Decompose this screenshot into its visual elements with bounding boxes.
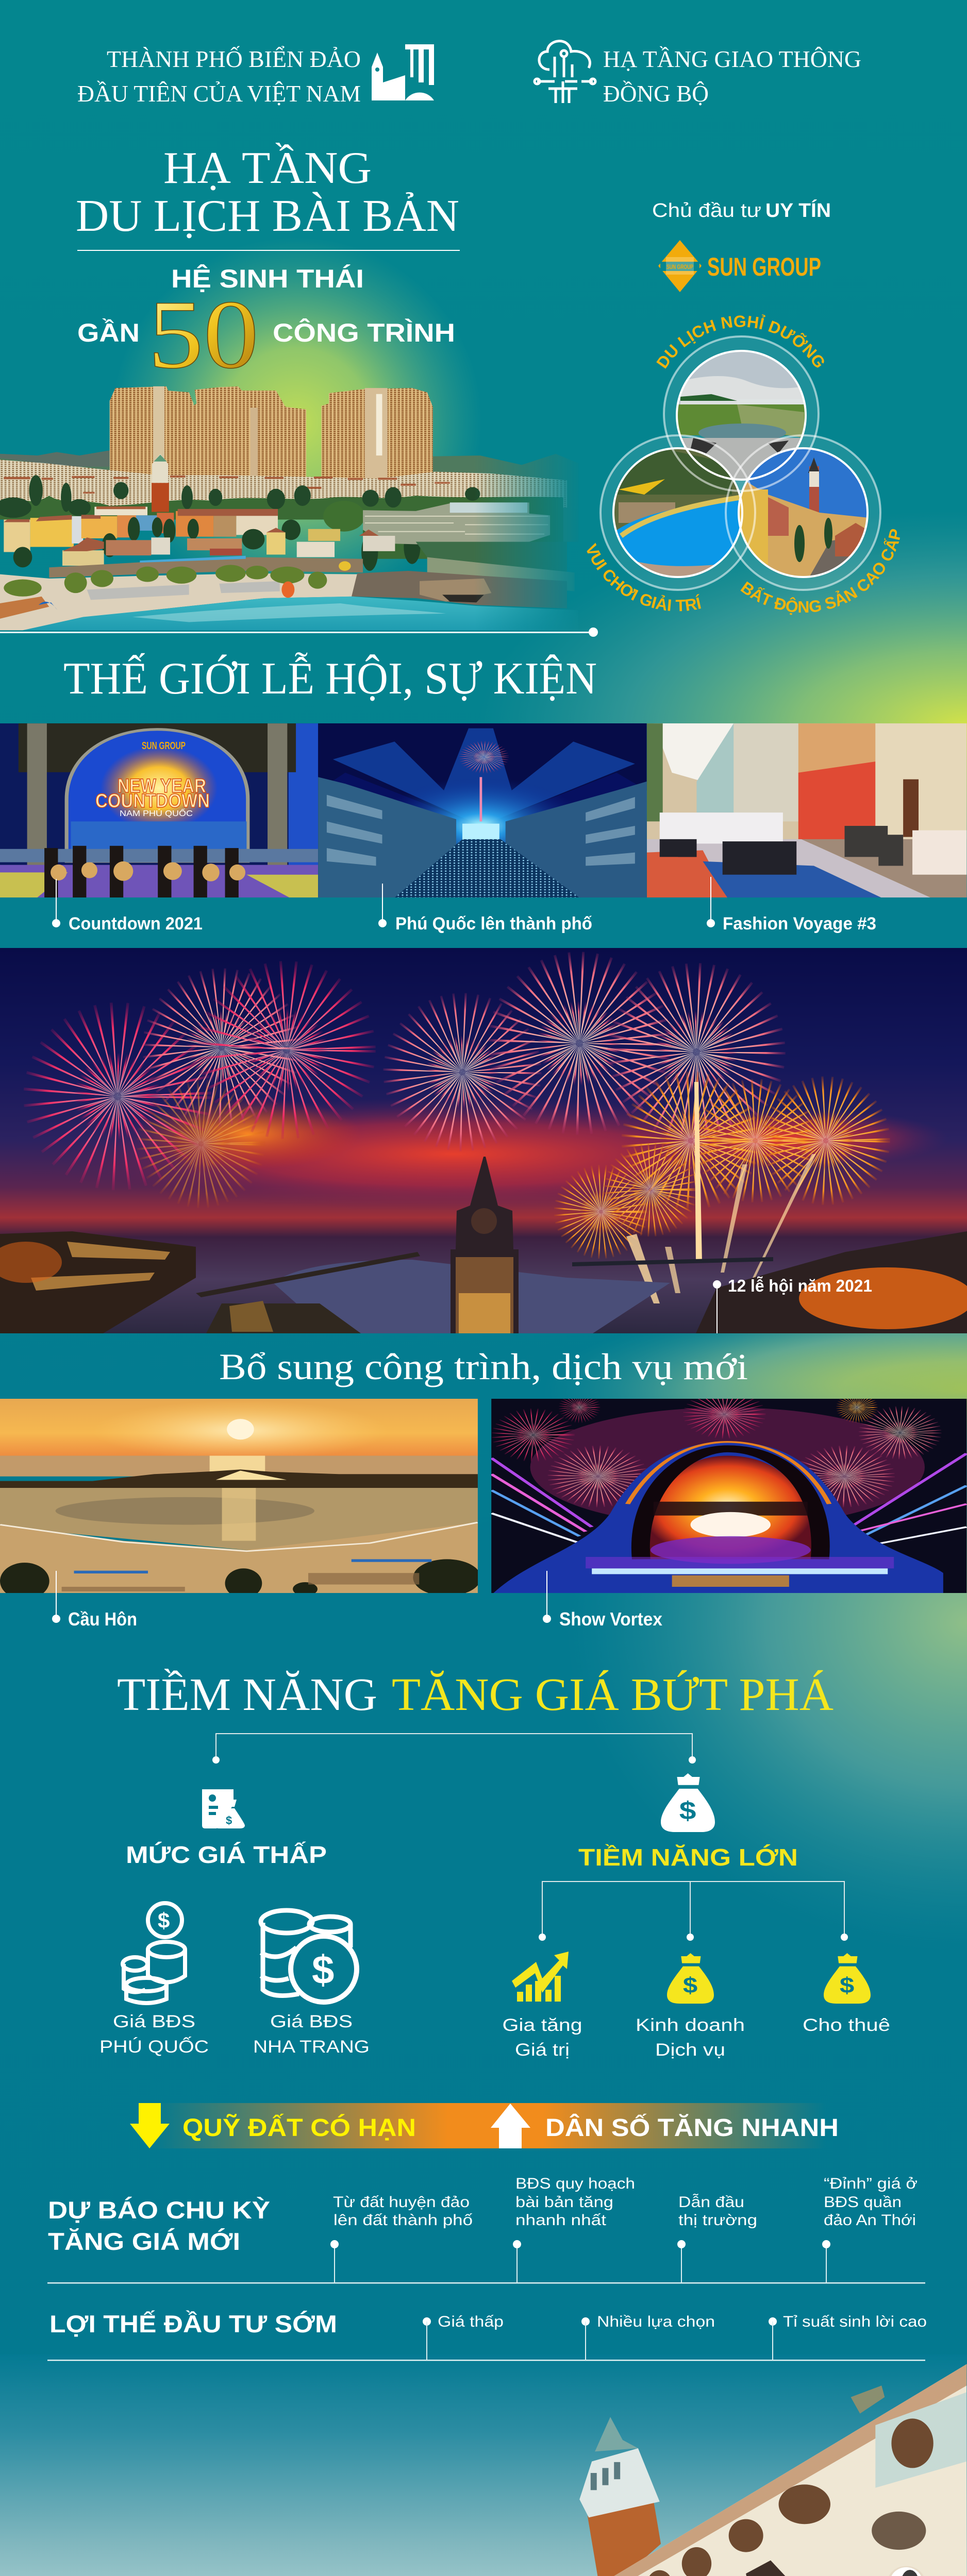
developer block [652,199,831,292]
dark trees among houses [13,517,421,571]
milestone 1: lên đất thành phố [334,2212,473,2229]
sea [23,597,578,630]
glass resort building [363,502,550,545]
label: Nha Trang price [253,2012,370,2057]
photo: Phu Quoc becomes a city [318,723,647,897]
block: early investor advantage: LỢI THẾ ĐẦU TƯ SỚM [49,2310,337,2337]
header right: synchronized transport: ĐỒNG BỘ [603,80,709,107]
lower villas [62,528,395,566]
photo: Fashion Voyage 3 [647,723,966,897]
label: rent: Cho thuê [803,2015,890,2035]
three pillars circle diagram [587,314,900,615]
benefit: many choices: Nhiều lựa chọn [597,2313,715,2330]
milestone 3: thị trường [678,2212,757,2229]
banner: limited land, growing population: DÂN SỐ TĂNG NHANH [545,2113,839,2142]
beach chairs [0,581,280,619]
background glow: festival heading [477,510,967,943]
connector: three branches [539,1882,848,1941]
banner: limited land, growing population: QUỸ ĐẤT CÓ HẠN [182,2113,416,2142]
fireworks bursts [69,995,859,1236]
heading: breakthrough price potential: TIỀM NĂNG [117,1668,377,1720]
milestone 1 [330,2194,473,2283]
caption: Kiss Bridge: Cầu Hôn [68,1608,137,1630]
header left: first island city: THÀNH PHỐ BIỂN ĐẢO [107,45,361,72]
column: big potential [502,1773,890,2060]
stage screen text: NEW YEAR [118,775,206,797]
caption strip for photos [0,897,967,948]
kites [39,561,351,610]
right tower [321,388,433,480]
upper town [0,460,567,507]
palm row [4,565,327,597]
header left: first island city: ĐẦU TIÊN CỦA VIỆT NAM [77,80,361,107]
label: Phu Quoc price: Giá BĐS [113,2012,195,2031]
caption: Kiss Bridge [52,1571,137,1630]
block: early investor advantage [47,2310,927,2361]
blue base [493,1442,943,1593]
beach [0,573,363,630]
benefit: low price: Giá thấp [438,2313,504,2330]
caption: 12 festivals: 12 lễ hội năm 2021 [728,1276,872,1295]
milestone 3 [677,2194,757,2283]
arrow up [491,2104,530,2148]
block: forecast of new price cycle: DỰ BÁO CHU KỲ [48,2196,270,2224]
arrow down [130,2103,170,2148]
heading: breakthrough price potential [117,1668,833,1720]
caption: Show Vortex [543,1571,662,1630]
arcade and pool [49,556,363,578]
photo: water park [613,446,742,582]
main title: HẠ TẦNG [163,143,372,193]
subtitle: ecosystem of nearly 50 works: HỆ SINH THÁI [171,264,364,293]
label: Nha Trang price: NHA TRANG [253,2037,370,2057]
main title: DU LỊCH BÀI BẢN [76,191,459,241]
subtitle: ecosystem of nearly 50 works: CÔNG TRÌNH [273,318,455,347]
left tower [110,386,194,480]
icon: business bag: $ [683,1973,697,1997]
arched upper windows [620,2418,933,2576]
rocks [352,571,567,608]
background glow: potential section [565,1293,967,1953]
heading: breakthrough price potential: TĂNG GIÁ BỨT PHÁ [392,1669,833,1720]
subtitle: ecosystem of nearly 50 works [77,264,455,389]
icon: coins Nha Trang: $ [312,1947,334,1992]
tower [579,2417,661,2576]
header right: synchronized transport: HẠ TẦNG GIAO THÔNG [603,45,861,72]
stage screen text [95,740,210,818]
photo: Countdown 2021 [0,723,318,897]
block: forecast of new price cycle: TĂNG GIÁ MỚI [48,2228,240,2255]
caption: Show Vortex: Show Vortex [559,1608,662,1630]
column: low price [99,1789,370,2057]
main title [76,143,460,251]
logo: Sun Group [658,240,821,292]
heading: festival world: THẾ GIỚI LỄ HỘI, SỰ KIỆN [63,652,597,704]
label: business services: Kinh doanh [636,2015,745,2035]
label: business services [636,2015,745,2060]
label: value growth: Giá trị [515,2040,570,2060]
label: resort tourism: DU LỊCH NGHỈ DƯỠNG [656,314,824,369]
label: premium real estate: BẤT ĐỘNG SẢN CAO CẤP [740,529,900,615]
developer block: UY TÍN [765,199,831,222]
main cream building [579,2364,966,2576]
hills [0,450,578,542]
label: low price: MỨC GIÁ THẤP [126,1841,327,1868]
icon: big money bag [661,1773,715,1832]
icon: price sheet and bag [202,1789,245,1828]
icon: business bag [667,1953,714,2004]
icon: rent bag [824,1953,871,2004]
logo: Sun Group: SUN GROUP [707,252,821,281]
caption: Phu Quoc city: Phú Quốc lên thành phố [395,914,592,934]
caption: Countdown 2021 [52,879,203,934]
hero illustration: resort town [0,386,578,630]
white photo borders [613,351,868,577]
right town lights [696,1231,967,1333]
label: big potential: TIỀM NĂNG LỚN [578,1844,798,1871]
caption: Fashion Voyage: Fashion Voyage #3 [723,914,876,934]
header right: synchronized transport [535,41,861,107]
hero base line with end dot [0,628,598,637]
banner: limited land, growing population [130,2103,839,2148]
outer rings [601,336,880,590]
photo: Italian street [737,448,869,582]
photo: fashion show at sunset town [0,2354,967,2576]
subtitle: ecosystem of nearly 50 works: GẦN [77,318,140,347]
stage screen text: NAM PHÚ QUỐC [120,808,193,818]
icon: price sheet and bag: $ [226,1814,232,1827]
milestone 2: nhanh nhất [515,2212,607,2229]
milestone 4: đảo An Thới [824,2212,916,2229]
label: Nha Trang price: Giá BĐS [270,2012,353,2031]
milestone 4: “Đỉnh” giá ở [824,2175,918,2192]
label: entertainment: VUI CHƠI GIẢI TRÍ [587,543,701,611]
middle tower [189,386,306,480]
round windows [794,2567,924,2576]
stage screen text: COUNTDOWN [95,790,210,812]
icon: rising chart [512,1952,569,2002]
milestone 2 [513,2175,635,2283]
caption: 12 festivals [713,1276,872,1333]
garden below resort [416,542,567,572]
coloured houses [4,506,278,552]
icon: coins Phu Quoc: $ [158,1908,170,1933]
block: forecast of new price cycle [47,2175,925,2283]
subtitle: ecosystem of nearly 50 works: 50 [148,281,259,389]
clock tower [152,454,169,512]
benefit: high yield: Tỉ suất sinh lời cao [783,2313,927,2330]
arch fire [641,1456,814,1559]
icon: cloud circuit [535,41,595,103]
heading: new works: Bổ sung công trình, dịch vụ mới [219,1346,748,1387]
laser beams [491,1453,966,1546]
milestone 1: Từ đất huyện đảo [333,2194,470,2211]
milestone 4 [822,2175,918,2283]
benefit: high yield [769,2313,927,2360]
caption: Phu Quoc city [378,884,592,934]
label: Phu Quoc price [99,2012,209,2057]
benefit: low price [423,2313,504,2360]
photo: resort [675,350,809,484]
background glow: new works heading [544,1293,967,1489]
milestone 2: BĐS quy hoạch [515,2175,635,2192]
background glow: hero [111,237,482,608]
label: value growth: Gia tăng [502,2015,582,2035]
tree belt [0,496,563,559]
icon: rent bag: $ [840,1973,854,1997]
connector: two branches [212,1734,696,1764]
clock tower [451,1157,519,1333]
rocket trails [626,1082,816,1303]
icon: city skyline [372,44,434,100]
photo: Vortex show [491,1399,966,1593]
label: Phu Quoc price: PHÚ QUỐC [99,2037,209,2057]
stage screen text: SUN GROUP [142,740,186,752]
logo: Sun Group: SUN GROUP [666,263,693,270]
milestone 3: Dẫn đầu [678,2194,744,2211]
icon: big money bag: $ [679,1797,696,1825]
photo: fireworks over bay [0,948,967,1333]
caption: Fashion Voyage [707,877,876,934]
icon: coins Phu Quoc [123,1903,185,2003]
shuttered windows [582,2561,789,2576]
developer block: Chủ đầu tư [652,200,761,222]
milestone 4: BĐS quần [824,2194,902,2211]
hill retaining wall [427,557,575,591]
label: business services: Dịch vụ [655,2040,725,2060]
header left: first island city [77,44,434,107]
caption: Countdown 2021: Countdown 2021 [69,914,203,934]
sunset glow [62,1097,845,1211]
photo: Kiss Bridge [0,1399,481,1600]
label: value growth [502,2015,582,2060]
benefit: many choices [581,2313,715,2360]
left seaside buildings [0,1231,196,1333]
bay water [273,1260,670,1333]
milestone 2: bài bản tăng [515,2194,613,2211]
icon: coins Nha Trang [261,1910,357,2002]
